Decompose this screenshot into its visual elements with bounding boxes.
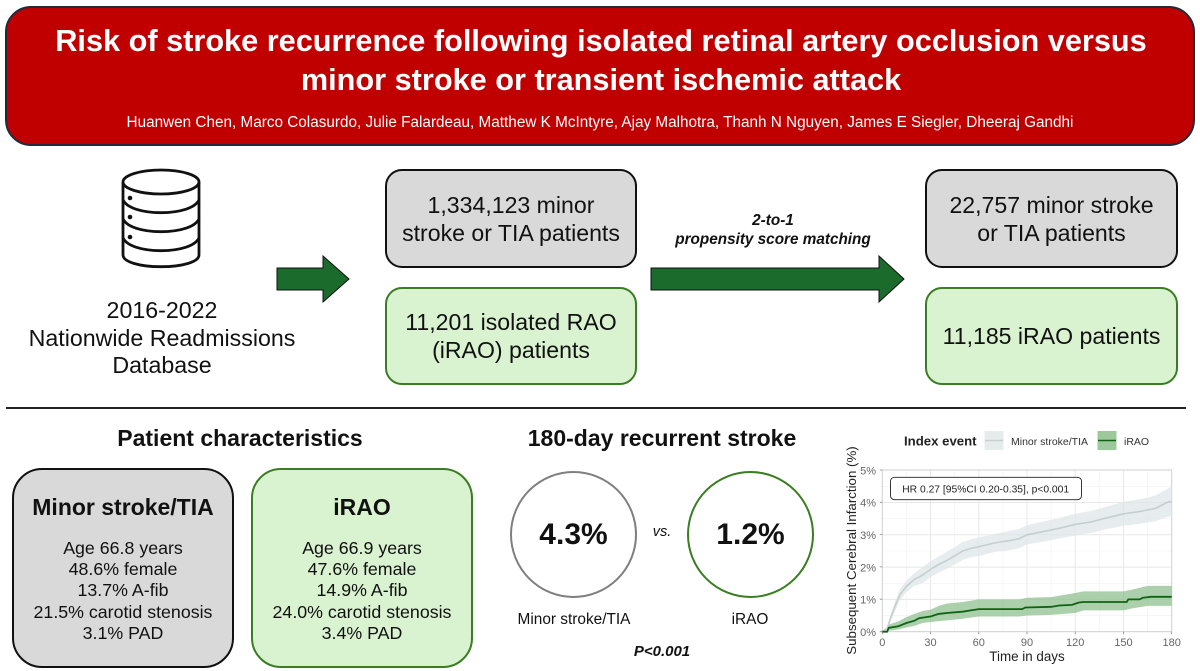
box: minor stroke cohort: 1,334,123 minor [428, 192, 594, 218]
band: minor stroke CI [882, 486, 1172, 632]
box: minor stroke cohort: stroke or TIA patients [402, 220, 620, 246]
arrow: database to cohorts [276, 255, 350, 303]
box: matched iRAO [925, 287, 1178, 385]
heading: recurrent stroke: 180-day recurrent stroke [528, 425, 796, 451]
arrow: propensity matching [650, 255, 905, 303]
chart: cumulative incidence [844, 431, 1181, 664]
database label [29, 297, 295, 378]
icon: database [122, 168, 200, 268]
card stats: 14.9% A-fib [317, 580, 407, 600]
card stats: 24.0% carotid stenosis [273, 602, 451, 622]
card stats: Age 66.8 years [63, 538, 183, 558]
heading: patient characteristics: Patient characteristics [117, 425, 363, 451]
legend [904, 431, 1149, 450]
legend: Minor stroke/TIA [1011, 436, 1088, 448]
legend: Index event [904, 434, 977, 448]
box: matched minor stroke [925, 169, 1178, 268]
card stats: 3.4% PAD [322, 623, 402, 643]
card stats: Age 66.9 years [302, 538, 422, 558]
matching label: propensity score matching [675, 231, 871, 248]
card stats [273, 538, 451, 643]
y axis labels: 2% [860, 562, 876, 574]
x axis labels: 90 [1021, 637, 1033, 649]
x axis labels: 180 [1163, 637, 1181, 649]
title banner [5, 6, 1195, 146]
circle: iRAO rate: 1.2% [716, 518, 785, 550]
card heading: iRAO [333, 494, 391, 520]
band: iRAO CI [882, 586, 1172, 632]
card heading: Minor stroke/TIA [32, 494, 214, 520]
box: iRAO cohort [385, 287, 637, 385]
y axis title: Subsequent Cerebral Infarction (%) [844, 446, 859, 655]
box: matched minor stroke: or TIA patients [977, 220, 1126, 246]
card: iRAO characteristics [251, 468, 473, 668]
title: minor stroke or transient ischemic attack [301, 62, 901, 96]
x axis title: Time in days [989, 649, 1065, 664]
vs label: vs. [653, 524, 671, 540]
line: iRAO [882, 597, 1172, 632]
y axis labels: 5% [860, 466, 876, 478]
label: minor stroke: Minor stroke/TIA [518, 611, 630, 628]
matching label: 2-to-1 [752, 212, 794, 229]
legend: iRAO [1124, 436, 1149, 448]
card stats: 47.6% female [308, 559, 416, 579]
card stats: 48.6% female [69, 559, 177, 579]
box: iRAO cohort: (iRAO) patients [432, 337, 590, 363]
circle: minor stroke rate: 4.3% [539, 518, 608, 550]
card: minor stroke characteristics [12, 468, 234, 668]
circle: iRAO rate [687, 471, 814, 598]
card stats: 21.5% carotid stenosis [34, 602, 212, 622]
box: matched iRAO: 11,185 iRAO patients [943, 323, 1160, 349]
x axis labels: 150 [1114, 637, 1133, 649]
circle: minor stroke rate [510, 471, 637, 598]
line: minor stroke [882, 502, 1172, 632]
y axis labels: 0% [860, 627, 876, 639]
x axis labels [879, 637, 1181, 649]
x axis labels: 0 [879, 637, 885, 649]
authors: Huanwen Chen, Marco Colasurdo, Julie Falardeau, Matthew K McIntyre, Ajay Malhotra, Thanh N Nguyen, James E Siegler, Dheeraj Gandhi [127, 114, 1073, 131]
y axis labels: 3% [860, 530, 876, 542]
title: Risk of stroke recurrence following isolated retinal artery occlusion versus [55, 23, 1147, 58]
label: iRAO: iRAO [732, 611, 768, 628]
card stats [34, 538, 212, 643]
y axis labels: 4% [860, 498, 876, 510]
plot frame [882, 470, 1172, 632]
database label: Database [112, 352, 212, 378]
database label: 2016-2022 [107, 297, 217, 323]
x axis labels: 60 [973, 637, 985, 649]
y axis labels [860, 466, 876, 639]
card stats: 13.7% A-fib [78, 580, 168, 600]
p value: P<0.001 [634, 643, 690, 660]
matching label [674, 212, 871, 248]
box: matched minor stroke: 22,757 minor stroke [949, 192, 1154, 218]
box: minor stroke cohort [385, 169, 637, 268]
x axis labels: 120 [1066, 637, 1084, 649]
hazard ratio annotation: HR 0.27 [95%CI 0.20-0.35], p<0.001 [902, 484, 1069, 496]
database label: Nationwide Readmissions [29, 324, 295, 350]
hazard ratio annotation [890, 477, 1082, 500]
x axis labels: 30 [924, 637, 937, 649]
card stats: 3.1% PAD [83, 623, 163, 643]
title [55, 23, 1147, 96]
box: iRAO cohort: 11,201 isolated RAO [405, 309, 617, 335]
y axis labels: 1% [860, 594, 876, 606]
